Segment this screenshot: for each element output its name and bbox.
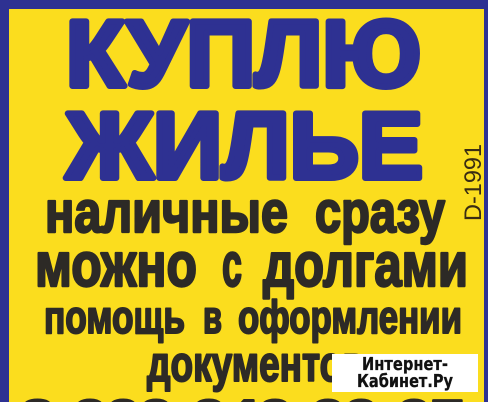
text: можно с долгами: можно (35, 231, 197, 300)
text: помощь в оформлении: помощь (44, 291, 185, 343)
text: помощь в оформлении (44, 291, 462, 343)
text: помощь в оформлении: в (203, 291, 222, 343)
text: vertical code D-1991: D-1991 (460, 144, 487, 221)
heading: ЖИЛЬЕ: ЖИЛЬЕ (65, 93, 423, 198)
text: можно с долгами (35, 231, 468, 300)
text: документов: документов (147, 336, 365, 392)
heading: КУПЛЮ: КУПЛЮ (66, 1, 421, 106)
watermark: Интернет-Кабинет.Ру: Кабинет.Ру (357, 371, 453, 392)
text: наличные сразу: сразу (315, 180, 445, 245)
text: можно с долгами: с (222, 231, 242, 300)
watermark: Интернет-Кабинет.Ру (332, 354, 478, 392)
text: наличные сразу: наличные (45, 180, 288, 245)
watermark: Интернет-Кабинет.Ру: Интернет- (362, 354, 448, 375)
